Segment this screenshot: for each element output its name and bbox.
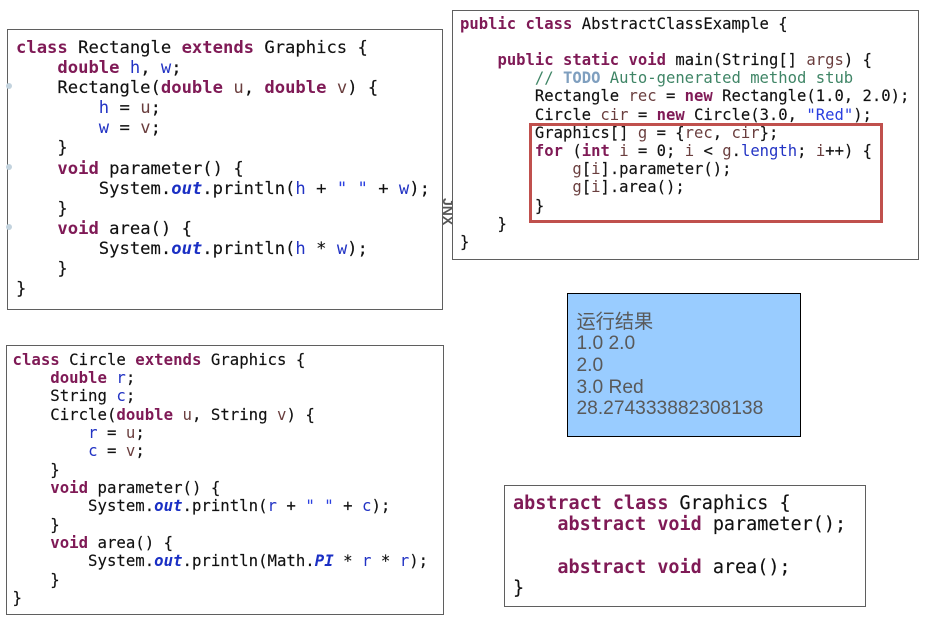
result text [576,312,763,419]
result text: 3.0 Red [576,377,644,398]
result text: 2.0 [576,355,603,376]
code: Circle: class Circle extends Graphics { double r; String c; Circle(double u, String v) { r = u; c = v; } void parameter() { System.out.println(r + " " + c); } void area() { System.out.println(Math.PI * r * r); } } [12,350,428,607]
code: Graphics: abstract class Graphics { abstract void parameter(); abstract void area(); } [513,493,846,599]
fold marker: parameter [6,164,12,170]
panel: Circle class code [6,345,444,615]
red highlight box [529,122,883,222]
code: main: public class AbstractClassExample { public static void main(String[] args) { // TODO Auto-generated method stub Rectangle rec = new Rectangle(1.0, 2.0); Circle cir = new Circle(3.0, "Red"); Graphics[] g = {rec, cir}; for (int i = 0; i < g.length; i++) { g[i].parameter(); g[i].area(); } } } [460,15,909,251]
result text: 运行结果 [576,312,653,332]
panel: Rectangle class code [7,29,443,310]
panel: run result [567,293,801,437]
result text: 28.274333882308138 [576,398,763,419]
panel: abstract Graphics class code [504,485,866,607]
fold marker: area [6,224,12,230]
result text: 1.0 2.0 [576,333,635,354]
code: Rectangle: class Rectangle extends Graphics { double h, w; Rectangle(double u, double v) { h = u; w = v; } void parameter() { System.out.println(h + " " + w); } void area() { System.out.println(h * w); } } [16,38,430,299]
panel: AbstractClassExample main code [452,10,919,260]
fold marker: constructor [6,83,12,89]
